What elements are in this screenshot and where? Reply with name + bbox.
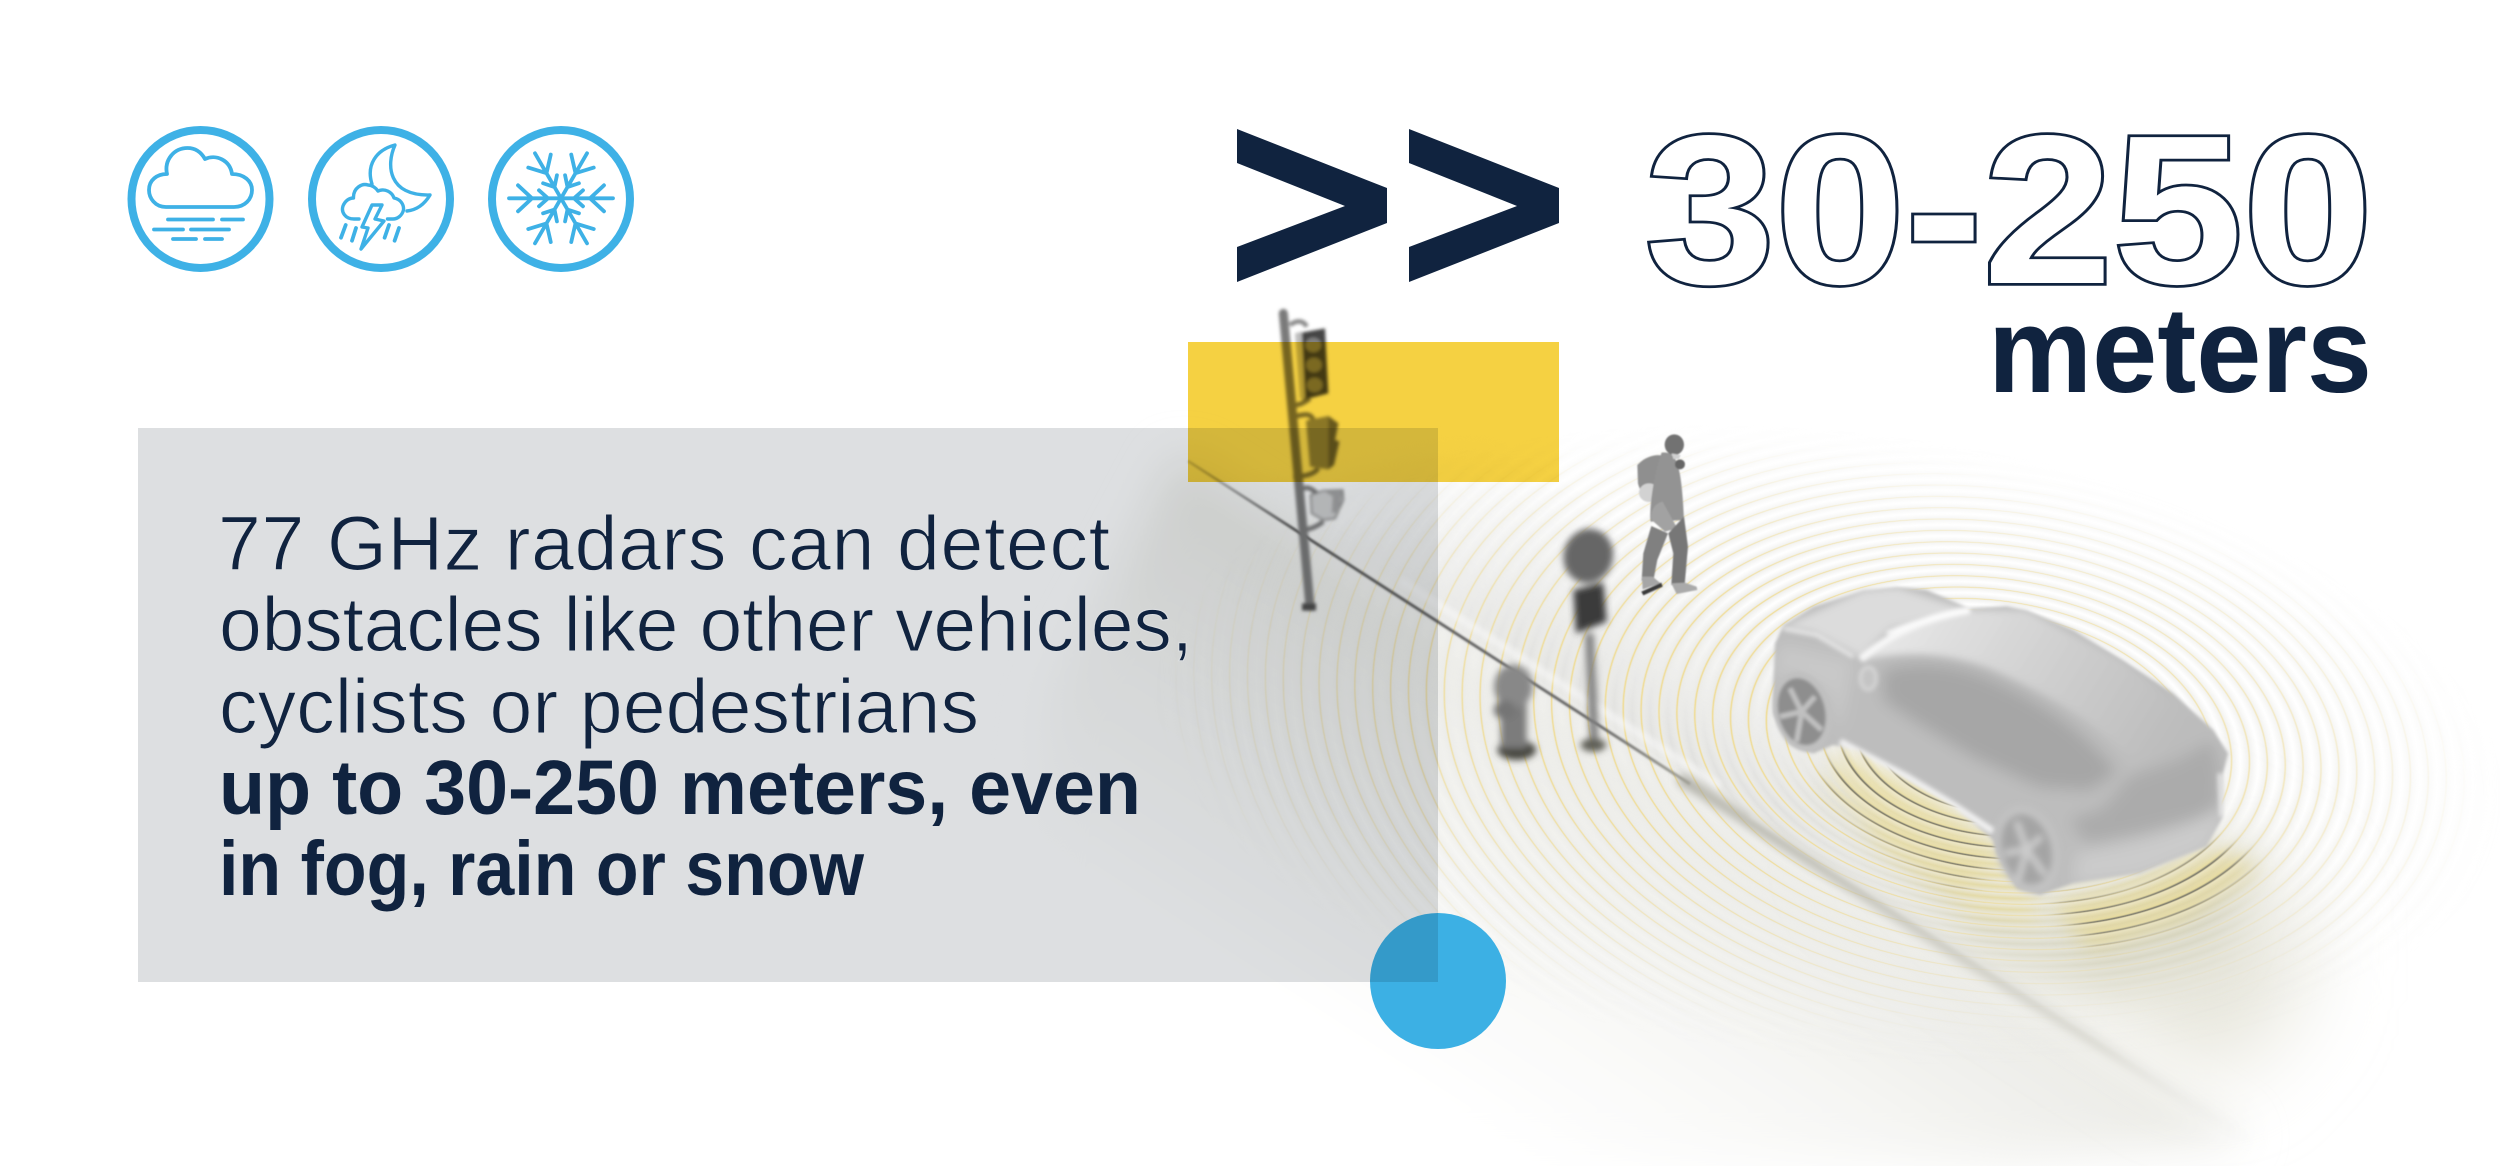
street sign — [1557, 523, 1619, 752]
illustration: street scene with radar waves — [1108, 306, 2447, 1162]
body text — [218, 501, 1193, 912]
grey text panel — [138, 428, 1438, 982]
curb line — [1188, 461, 2260, 1147]
bold text lines: in fog, rain or snow — [219, 826, 865, 912]
icon: night storm — [312, 130, 450, 268]
front wheel — [1765, 665, 1840, 758]
light text lines: cyclists or pedestrians — [219, 664, 979, 750]
fire hydrant — [1494, 665, 1536, 760]
range number outlined: 30-250 — [1645, 91, 2373, 328]
icon: fog cloud — [132, 130, 270, 268]
car body — [1772, 585, 2230, 896]
icon: snowflake — [492, 130, 630, 268]
rear wheel — [1986, 799, 2069, 899]
radar wave rings — [1194, 452, 2447, 1026]
ground shading along the curb — [1108, 466, 2329, 1162]
bold text lines: up to 30-250 meters, even — [219, 745, 1141, 831]
car shading — [1788, 587, 2128, 721]
unit label: meters — [1988, 282, 2372, 418]
blue circle accent — [1370, 913, 1506, 1049]
pedestrian with backpack — [1637, 434, 1697, 595]
light text lines — [218, 501, 1193, 750]
light text lines: obstacles like other vehicles, — [219, 582, 1193, 668]
arrow: double chevron — [1237, 129, 1559, 282]
bold text lines — [219, 745, 1141, 912]
yellow rectangle accent — [1188, 342, 1559, 482]
light text lines: 77 GHz radars can detect — [218, 501, 1110, 587]
car highlights — [1783, 610, 2222, 832]
car — [1771, 585, 2230, 896]
traffic light — [1283, 313, 1343, 611]
